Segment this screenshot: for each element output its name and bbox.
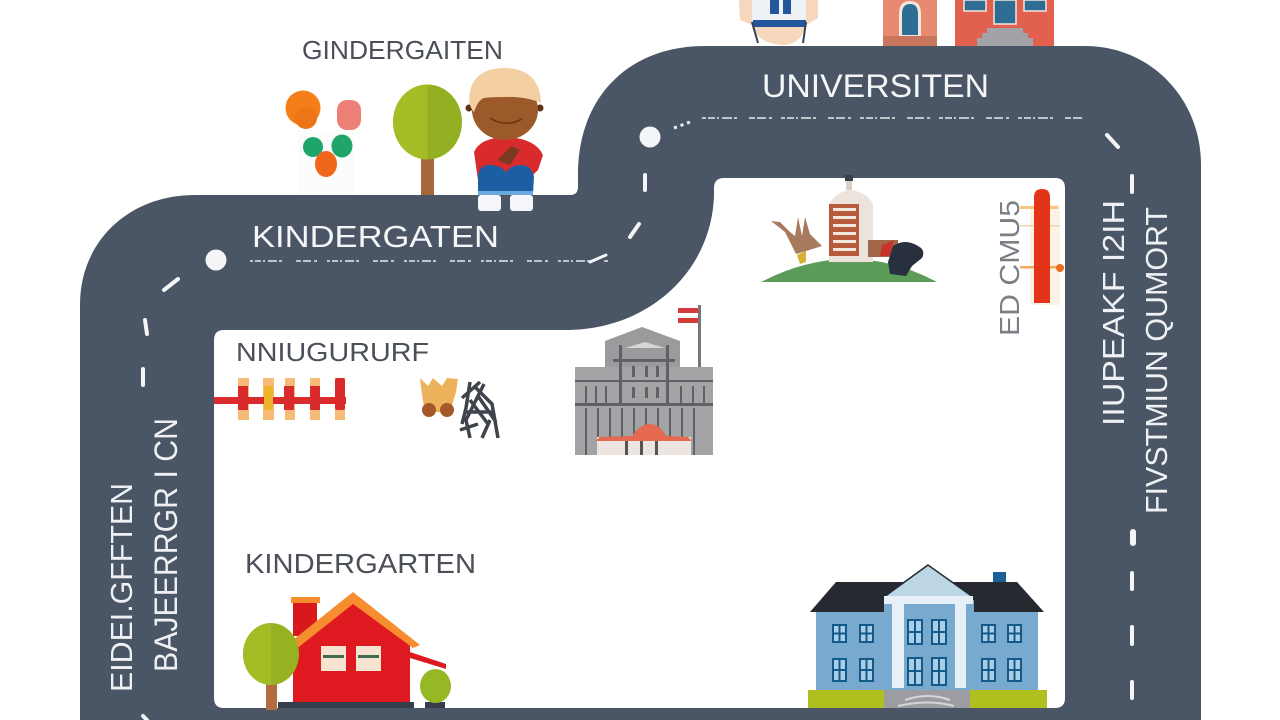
heading: kindergarten lower: KINDERGARTEN: [245, 548, 476, 579]
icon: grey government building: [575, 305, 713, 455]
icon: red building at top: [955, 0, 1054, 46]
road stop marker: university: [640, 126, 660, 148]
icon: tree: [393, 84, 462, 195]
road markings: [143, 118, 1133, 720]
heading: universiten on road: UNIVERSITEN: [762, 68, 989, 104]
vertical text: panel label: ED CMU5: [994, 200, 1025, 336]
icon: university on a hill: [761, 175, 937, 282]
heading: gindergaiten: GINDERGAITEN: [302, 35, 503, 65]
icon: seated child: [466, 68, 544, 211]
icon: thermometer gauge: [1020, 189, 1064, 305]
icon: scattered sketch: [420, 378, 498, 438]
icon: blue university hall: [808, 565, 1047, 708]
vertical text: left road line one: EIDEI.GFFTEN: [104, 483, 139, 692]
icon: fence bar: [214, 378, 346, 420]
icon: person at top: [739, 0, 818, 45]
icon: fruit cluster: [286, 90, 361, 193]
vertical text: right road line one: IIUPEAKF I2IH: [1096, 200, 1131, 426]
icon: red kindergarten house: [243, 592, 451, 710]
icon: small pink building at top: [883, 0, 937, 46]
vertical text: right road line two: FIVSTMIUN QUMORT: [1139, 207, 1174, 514]
vertical text: left road line two: BAJEERRGR I CN: [148, 418, 184, 672]
heading: nniugururf: NNIUGURURF: [236, 337, 429, 367]
road stop marker: kindergarten: [206, 250, 226, 270]
heading: kindergaten on road: KINDERGATEN: [252, 219, 499, 254]
